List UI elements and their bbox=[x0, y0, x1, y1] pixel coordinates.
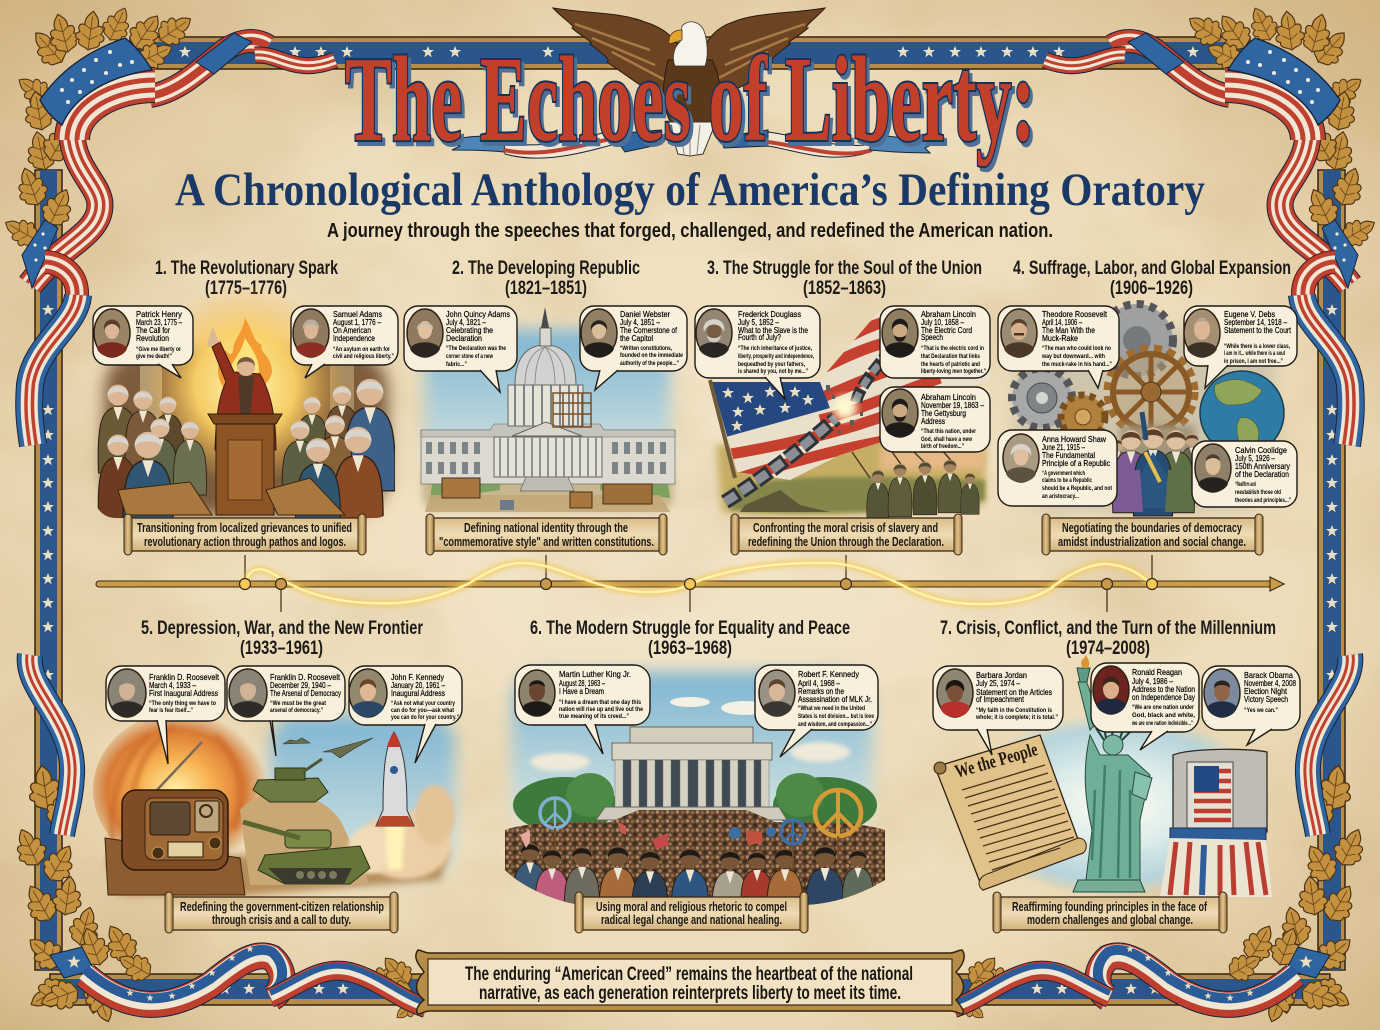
portrait bbox=[696, 309, 732, 357]
caption scroll: revolutionary action through pathos and logos. bbox=[144, 534, 346, 549]
caption scroll: redefining the Union through the Declaration. bbox=[748, 534, 944, 549]
speech bubble: Eugene V. Debs: in prison, I am not free...” bbox=[1224, 358, 1283, 365]
speech bubble: Abraham Lincoln, Electric Cord: “That is the electric cord in bbox=[921, 345, 984, 352]
speech bubble: Franklin D. Roosevelt, first inaugural: fear is fear itself...” bbox=[149, 707, 193, 714]
heading 1 bbox=[155, 258, 338, 299]
speech bubble: Martin Luther King Jr.: true meaning of its creed...” bbox=[559, 713, 629, 720]
speech bubble: Theodore Roosevelt: “The man who could look no bbox=[1042, 345, 1111, 352]
speech bubble: Frederick Douglass: What to the Slave is the bbox=[738, 325, 808, 335]
speech bubble: Anna Howard Shaw: an aristocracy... bbox=[1042, 493, 1079, 500]
portrait bbox=[1003, 434, 1039, 482]
illustration: constitution, statue of liberty, voting booth bbox=[934, 655, 1272, 897]
speech bubble: John F. Kennedy: you can do for your country.” bbox=[391, 714, 459, 721]
speech bubble: Abraham Lincoln, Gettysburg: The Gettysburg bbox=[921, 408, 966, 418]
speech bubble: Ronald Reagan: July 4, 1986 – bbox=[1132, 676, 1173, 686]
speech bubble: Martin Luther King Jr. bbox=[515, 665, 650, 754]
caption scroll: Defining national identity through the bbox=[464, 520, 628, 535]
portrait bbox=[1195, 444, 1231, 492]
speech bubble: John Quincy Adams: Celebrating the bbox=[446, 325, 493, 335]
speech bubble: Frederick Douglass: Fourth of July? bbox=[738, 332, 781, 342]
banner under the title bbox=[446, 130, 937, 158]
speech bubble: Franklin D. Roosevelt, arsenal of democracy: Franklin D. Roosevelt bbox=[270, 672, 341, 682]
speech bubble: Frederick Douglass: is shared by you, not by me...” bbox=[738, 368, 808, 375]
speech bubble: Abraham Lincoln, Gettysburg: birth of freedom...” bbox=[921, 443, 964, 450]
speech bubble: Barbara Jordan: Barbara Jordan bbox=[976, 670, 1027, 680]
speech bubble: Ronald Reagan: on Independence Day bbox=[1132, 692, 1196, 702]
speech bubble: John F. Kennedy bbox=[349, 666, 462, 763]
speech bubble: John F. Kennedy: “Ask not what your country bbox=[391, 700, 455, 707]
caption scroll: Redefining the government-citizen relationship bbox=[180, 899, 384, 914]
speech bubble: Abraham Lincoln, Electric Cord: liberty-loving men together.” bbox=[921, 368, 986, 375]
speech bubble: Theodore Roosevelt: Muck-Rake bbox=[1042, 333, 1078, 343]
speech bubble: Martin Luther King Jr.: I Have a Dream bbox=[559, 686, 604, 696]
speech bubble: Franklin D. Roosevelt, arsenal of democracy: December 29, 1940 – bbox=[270, 680, 331, 690]
illustration: US Capitol under construction bbox=[421, 307, 675, 512]
speech bubble: Samuel Adams bbox=[291, 306, 398, 378]
speech bubble: Abraham Lincoln, Electric Cord: July 10, 1858 – bbox=[921, 317, 964, 327]
portrait bbox=[759, 670, 795, 716]
speech bubble: Theodore Roosevelt bbox=[998, 306, 1119, 388]
speech bubble: Daniel Webster: the Capitol bbox=[620, 333, 653, 343]
speech bubble: Samuel Adams: “An asylum on earth for bbox=[333, 346, 390, 353]
speech bubble: Abraham Lincoln, Electric Cord: Abraham Lincoln bbox=[921, 309, 976, 319]
heading 3: (1852–1863) bbox=[803, 278, 886, 299]
speech bubble: Ronald Reagan: God, black and white, bbox=[1132, 712, 1195, 719]
speech bubble: John Quincy Adams: corner stone of a new bbox=[446, 353, 494, 360]
speech bubble: Abraham Lincoln, Electric Cord: Speech bbox=[921, 332, 943, 342]
portrait bbox=[407, 309, 443, 357]
speech bubble: Barack Obama: Victory Speech bbox=[1244, 694, 1288, 704]
speech bubble: Barack Obama: “Yes we can.” bbox=[1244, 707, 1278, 714]
speech bubble: Robert F. Kennedy: States is not division... but is love bbox=[798, 713, 874, 720]
caption scroll bbox=[993, 892, 1227, 933]
speech bubble: Eugene V. Debs: I am in it... while there is a soul bbox=[1224, 350, 1285, 357]
speech bubble: Calvin Coolidge: theories and principles...” bbox=[1235, 497, 1291, 504]
caption scroll: Reaffirming founding principles in the face of bbox=[1012, 899, 1207, 914]
heading 6 bbox=[530, 618, 850, 659]
speech bubble: Franklin D. Roosevelt, first inaugural: March 4, 1933 – bbox=[149, 680, 196, 690]
speech bubble: Theodore Roosevelt: April 14, 1906 – bbox=[1042, 317, 1082, 327]
subtitle: A Chronological Anthology of America’s Defining Oratory bbox=[175, 164, 1205, 216]
speech bubble: Abraham Lincoln, Gettysburg: Abraham Lincoln bbox=[921, 392, 976, 402]
illustration: orator at podium bbox=[98, 285, 395, 544]
speech bubble: John Quincy Adams: fabric...” bbox=[446, 361, 467, 368]
speech bubble: Eugene V. Debs: “While there is a lower class, bbox=[1224, 343, 1290, 350]
caption scroll: "commemorative style" and written constitutions. bbox=[439, 534, 654, 549]
panel 3: the struggle for the soul of the union bbox=[695, 258, 1000, 555]
speech bubble: Daniel Webster: “Written constitutions, bbox=[620, 345, 672, 352]
speech bubble: Patrick Henry: Revolution bbox=[136, 333, 169, 343]
closing banner: The enduring “American Creed” remains the heartbeat of the national bbox=[465, 964, 913, 985]
illustration: gears, globe and marching suffragists bbox=[1012, 304, 1284, 516]
speech bubble: Barbara Jordan: “My faith in the Constitution is bbox=[976, 707, 1052, 714]
speech bubble: Barbara Jordan: Statement on the Articles bbox=[976, 687, 1052, 697]
speech bubble: Calvin Coolidge: of the Declaration bbox=[1235, 469, 1289, 479]
speech bubble: John F. Kennedy: John F. Kennedy bbox=[391, 672, 445, 682]
speech bubble: Abraham Lincoln, Electric Cord: The Electric Cord bbox=[921, 325, 972, 335]
speech bubble: Eugene V. Debs bbox=[1184, 306, 1297, 388]
heading 2: (1821–1851) bbox=[505, 278, 587, 299]
portrait bbox=[581, 309, 617, 357]
speech bubble: Franklin D. Roosevelt, arsenal of democracy: arsenal of democracy.” bbox=[270, 707, 323, 714]
heading 2 bbox=[452, 258, 640, 299]
we the people scroll bbox=[934, 735, 1086, 890]
heading 3 bbox=[707, 258, 982, 299]
caption scroll bbox=[1042, 514, 1263, 555]
speech bubble: John Quincy Adams: “The Declaration was the bbox=[446, 345, 506, 352]
speech bubble: Abraham Lincoln, Gettysburg bbox=[880, 387, 990, 452]
speech bubble: Ronald Reagan bbox=[1091, 663, 1199, 750]
caption scroll: Transitioning from localized grievances to unified bbox=[137, 520, 352, 535]
heading 1: (1775–1776) bbox=[205, 278, 287, 299]
speech bubble: Robert F. Kennedy: April 4, 1968 – bbox=[798, 678, 840, 688]
speech bubble: Anna Howard Shaw bbox=[998, 430, 1117, 506]
caption scroll bbox=[124, 514, 366, 555]
heading 2: 2. The Developing Republic bbox=[452, 258, 640, 279]
caption scroll bbox=[165, 892, 398, 933]
speech bubble: Daniel Webster: July 4, 1851 – bbox=[620, 317, 660, 327]
speech bubble: Robert F. Kennedy: “What we need in the United bbox=[798, 705, 865, 712]
ribbons and oak leaves, left side bbox=[0, 3, 426, 1027]
portrait bbox=[937, 669, 973, 717]
portrait bbox=[1093, 666, 1129, 714]
speech bubble: Martin Luther King Jr.: August 28, 1963 – bbox=[559, 678, 605, 688]
speech bubble: Patrick Henry: The Call for bbox=[136, 325, 170, 335]
caption scroll: Confronting the moral crisis of slavery and bbox=[753, 520, 938, 535]
heading 5 bbox=[141, 618, 423, 659]
speech bubble: Frederick Douglass: Frederick Douglass bbox=[738, 309, 801, 319]
speech bubble: John F. Kennedy: January 20, 1961 – bbox=[391, 680, 445, 690]
caption scroll bbox=[575, 892, 808, 933]
speech bubble: Frederick Douglass: “The rich inheritance of justice, bbox=[738, 345, 812, 352]
speech bubble: Franklin D. Roosevelt, arsenal of democracy bbox=[227, 666, 345, 756]
heading 1: 1. The Revolutionary Spark bbox=[155, 258, 338, 279]
speech bubble: Franklin D. Roosevelt, arsenal of democracy: “We must be the great bbox=[270, 700, 327, 707]
portrait bbox=[882, 389, 918, 437]
illustration: flag, broken chain and soldiers bbox=[708, 310, 991, 518]
speech bubble: Theodore Roosevelt: The Man With the bbox=[1042, 325, 1095, 335]
speech bubble: Frederick Douglass bbox=[695, 306, 820, 399]
closing banner: narrative, as each generation reinterprets liberty to meet its time. bbox=[479, 983, 901, 1004]
heading 3: 3. The Struggle for the Soul of the Union bbox=[707, 258, 982, 279]
portrait bbox=[349, 669, 387, 717]
speech bubble: Samuel Adams: civil and religious liberty.” bbox=[333, 353, 394, 360]
speech bubble: Anna Howard Shaw: Anna Howard Shaw bbox=[1042, 434, 1107, 444]
speech bubble: Samuel Adams: Independence bbox=[333, 333, 375, 343]
illustration: Lincoln Memorial rally bbox=[505, 672, 885, 934]
heading 6: (1963–1968) bbox=[648, 638, 732, 659]
speech bubble: Calvin Coolidge: Calvin Coolidge bbox=[1235, 445, 1287, 455]
speech bubble: Calvin Coolidge: “Reaffirm and bbox=[1235, 481, 1256, 488]
speech bubble: Abraham Lincoln, Gettysburg: November 19, 1863 – bbox=[921, 400, 984, 410]
portrait bbox=[1204, 669, 1240, 717]
speech bubble: Daniel Webster: The Cornerstone of bbox=[620, 325, 677, 335]
caption scroll bbox=[426, 514, 667, 555]
speech bubble: Anna Howard Shaw: claims to be a Republic bbox=[1042, 477, 1092, 484]
speech bubble: Barbara Jordan bbox=[933, 666, 1063, 755]
speech bubble: Calvin Coolidge: July 5, 1926 – bbox=[1235, 453, 1275, 463]
speech bubble: Patrick Henry bbox=[93, 306, 193, 378]
speech bubble: Daniel Webster: Daniel Webster bbox=[620, 309, 670, 319]
speech bubble: Abraham Lincoln, Electric Cord: that Declaration that links bbox=[921, 353, 980, 360]
caption scroll: radical legal change and national healing. bbox=[601, 912, 782, 927]
speech bubble: Daniel Webster: founded on the immediate bbox=[620, 352, 683, 359]
speech bubble: Barack Obama: Barack Obama bbox=[1244, 670, 1293, 680]
speech bubble: John F. Kennedy: can do for you—ask what bbox=[391, 707, 455, 714]
speech bubble: Patrick Henry: “Give me liberty or bbox=[136, 346, 181, 353]
panel 2: the developing republic bbox=[404, 258, 687, 555]
illustration: radio, tanks and rocket bbox=[93, 710, 455, 895]
panel 1: the revolutionary spark bbox=[93, 258, 398, 555]
speech bubble: Calvin Coolidge bbox=[1192, 441, 1297, 507]
speech bubble: Calvin Coolidge: 150th Anniversary bbox=[1235, 461, 1291, 471]
speech bubble: Frederick Douglass: July 5, 1852 – bbox=[738, 317, 779, 327]
speech bubble: John Quincy Adams: July 4, 1821 – bbox=[446, 317, 486, 327]
speech bubble: Eugene V. Debs: September 14, 1918 – bbox=[1224, 317, 1287, 327]
speech bubble: Theodore Roosevelt: way but downward... with bbox=[1041, 353, 1105, 360]
speech bubble: Patrick Henry: give me death!” bbox=[136, 353, 172, 360]
portrait bbox=[108, 669, 146, 717]
voting booth bbox=[1160, 749, 1272, 897]
speech bubble: Martin Luther King Jr.: nation will rise up and live out the bbox=[559, 706, 643, 713]
panel 6: the modern struggle for equality and peace bbox=[505, 618, 885, 934]
speech bubble: Eugene V. Debs: Eugene V. Debs bbox=[1224, 309, 1275, 319]
timeline bbox=[96, 555, 1284, 612]
speech bubble: Abraham Lincoln, Gettysburg: “That this nation, under bbox=[921, 428, 976, 435]
speech bubble: Anna Howard Shaw: June 21, 1915 – bbox=[1042, 442, 1085, 452]
speech bubble: Robert F. Kennedy: Robert F. Kennedy bbox=[798, 669, 860, 679]
speech bubble: Barack Obama: November 4, 2008 bbox=[1244, 678, 1296, 688]
portrait bbox=[519, 670, 555, 716]
speech bubble: Franklin D. Roosevelt, first inaugural bbox=[106, 666, 225, 764]
speech bubble: Patrick Henry: Patrick Henry bbox=[136, 309, 183, 319]
heading 5: (1933–1961) bbox=[240, 638, 323, 659]
speech bubble: Daniel Webster: authority of the people...” bbox=[620, 360, 679, 367]
speech bubble: Martin Luther King Jr.: “I have a dream that one day this bbox=[559, 699, 641, 706]
heading 5: 5. Depression, War, and the New Frontier bbox=[141, 618, 423, 639]
speech bubble: Barbara Jordan: whole; it is complete; it is total.” bbox=[975, 714, 1058, 721]
speech bubble: Patrick Henry: March 23, 1775 – bbox=[136, 317, 182, 327]
speech bubble: Franklin D. Roosevelt, first inaugural: Franklin D. Roosevelt bbox=[149, 672, 220, 682]
portrait bbox=[94, 309, 130, 357]
speech bubble: Barack Obama: Election Night bbox=[1244, 686, 1288, 696]
caption scroll bbox=[731, 514, 962, 555]
speech bubble: John Quincy Adams bbox=[404, 306, 517, 392]
speech bubble: Barbara Jordan: of Impeachment bbox=[976, 694, 1024, 704]
closing banner bbox=[416, 950, 964, 1014]
heading 4: (1906–1926) bbox=[1110, 278, 1193, 299]
heading 4: 4. Suffrage, Labor, and Global Expansion bbox=[1013, 258, 1291, 279]
speech bubble: Robert F. Kennedy bbox=[755, 665, 878, 757]
speech bubble: Franklin D. Roosevelt, first inaugural: “The only thing we have to bbox=[149, 700, 216, 707]
speech bubble: John Quincy Adams: John Quincy Adams bbox=[446, 309, 510, 319]
speech bubble: Anna Howard Shaw: Principle of a Republic bbox=[1042, 458, 1111, 468]
heading 7: (1974–2008) bbox=[1066, 638, 1150, 659]
caption scroll: Negotiating the boundaries of democracy bbox=[1062, 520, 1243, 535]
portrait bbox=[229, 669, 267, 717]
speech bubble: Frederick Douglass: liberty, prosperity and independence, bbox=[738, 353, 814, 360]
portrait bbox=[293, 309, 329, 357]
speech bubble: Barack Obama bbox=[1202, 666, 1300, 745]
tagline: A journey through the speeches that forged, challenged, and redefined the American nation. bbox=[327, 220, 1053, 242]
speech bubble: Abraham Lincoln, Electric Cord bbox=[880, 306, 990, 378]
speech bubble: Franklin D. Roosevelt, arsenal of democracy: The Arsenal of Democracy bbox=[270, 688, 342, 698]
speech bubble: Anna Howard Shaw: should be a Republic, and not bbox=[1042, 485, 1113, 492]
panel 5: depression, war and the new frontier bbox=[93, 618, 462, 933]
speech bubble: Abraham Lincoln, Electric Cord: the hearts of patriotic and bbox=[921, 361, 980, 368]
speech bubble: Samuel Adams: On American bbox=[333, 325, 371, 335]
speech bubble: Frederick Douglass: bequeathed by your fathers, bbox=[738, 361, 805, 368]
ribbons and oak leaves, right side bbox=[954, 3, 1380, 1027]
speech bubble: Anna Howard Shaw: The Fundamental bbox=[1042, 450, 1095, 460]
speech bubble: Theodore Roosevelt: the muck-rake in his hand...” bbox=[1042, 361, 1112, 368]
portrait bbox=[1184, 309, 1220, 357]
portrait bbox=[882, 309, 918, 357]
panel 4: suffrage, labor and global expansion bbox=[998, 258, 1297, 555]
speech bubble: Anna Howard Shaw: “A government which bbox=[1042, 470, 1085, 477]
heading 4 bbox=[1013, 258, 1291, 299]
speech bubble: Calvin Coolidge: reestablish those old bbox=[1235, 489, 1281, 496]
caption scroll: through crisis and a call to duty. bbox=[212, 912, 351, 927]
caption scroll: modern challenges and global change. bbox=[1027, 912, 1193, 927]
speech bubble: Abraham Lincoln, Gettysburg: God, shall have a new bbox=[921, 436, 973, 443]
heading 7: 7. Crisis, Conflict, and the Turn of the Millennium bbox=[940, 618, 1276, 639]
panel 7: crisis, conflict and the turn of the millennium bbox=[933, 618, 1300, 933]
speech bubble: Franklin D. Roosevelt, first inaugural: First Inaugural Address bbox=[149, 688, 218, 698]
speech bubble: Ronald Reagan: “We are one nation under bbox=[1132, 704, 1194, 711]
speech bubble: Theodore Roosevelt: Theodore Roosevelt bbox=[1042, 309, 1108, 319]
portrait bbox=[1001, 309, 1037, 357]
heading 7 bbox=[940, 618, 1276, 659]
speech bubble: Eugene V. Debs: Statement to the Court bbox=[1224, 325, 1291, 335]
statue of liberty bbox=[1073, 655, 1152, 892]
speech bubble: Robert F. Kennedy: Assassination of MLK Jr. bbox=[798, 694, 872, 704]
we the people scroll: We the People bbox=[953, 739, 1040, 783]
speech bubble: Daniel Webster bbox=[580, 306, 687, 390]
speech bubble: John F. Kennedy: Inaugural Address bbox=[391, 688, 445, 698]
speech bubble: Barbara Jordan: July 25, 1974 – bbox=[976, 678, 1020, 688]
heading 6: 6. The Modern Struggle for Equality and Peace bbox=[530, 618, 850, 639]
speech bubble: Ronald Reagan: Address to the Nation bbox=[1132, 684, 1195, 694]
speech bubble: Robert F. Kennedy: and wisdom, and compassion...” bbox=[798, 721, 872, 728]
speech bubble: John Quincy Adams: Declaration bbox=[446, 333, 482, 343]
caption scroll: Using moral and religious rhetoric to compel bbox=[596, 899, 787, 914]
icon: bald eagle bbox=[553, 8, 825, 156]
speech bubble: Ronald Reagan: Ronald Reagan bbox=[1132, 667, 1182, 677]
speech bubble: Ronald Reagan: we are one nation indivisible...” bbox=[1131, 720, 1193, 727]
caption scroll: amidst industrialization and social change. bbox=[1058, 534, 1246, 549]
speech bubble: Samuel Adams: Samuel Adams bbox=[333, 309, 382, 319]
speech bubble: Robert F. Kennedy: Remarks on the bbox=[798, 686, 844, 696]
speech bubble: Samuel Adams: August 1, 1776 – bbox=[333, 317, 381, 327]
speech bubble: Abraham Lincoln, Gettysburg: Address bbox=[921, 416, 945, 426]
speech bubble: Martin Luther King Jr.: Martin Luther King Jr. bbox=[559, 669, 631, 679]
